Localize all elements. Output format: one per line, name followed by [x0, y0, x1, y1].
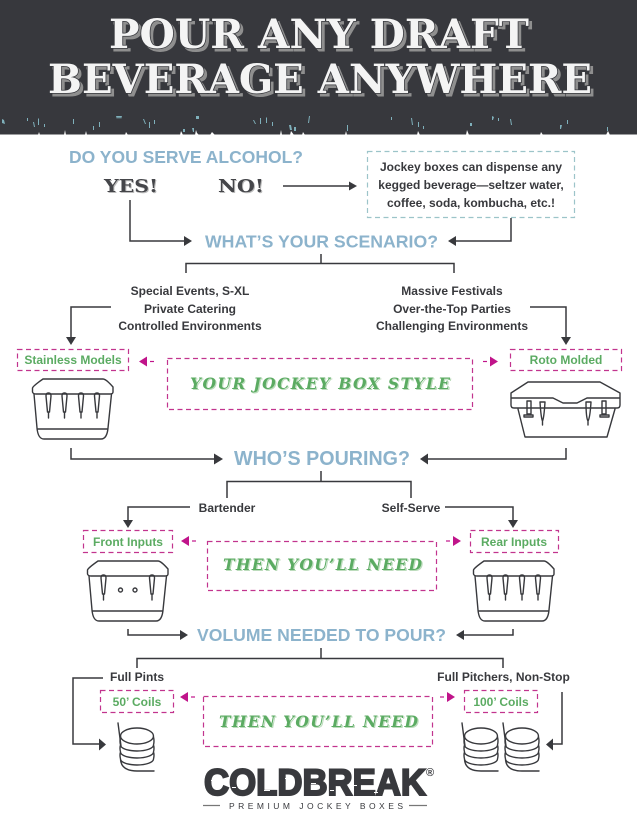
- label: 100' coils: [464, 690, 538, 712]
- text: large scenarios: Challenging Environments: [376, 319, 528, 333]
- callout: then you'll need: THEN YOU’LL NEED: [224, 556, 424, 575]
- callout: non alcoholic: Jockey boxes can dispense any: [380, 160, 562, 174]
- answer: no: NO!: [219, 177, 265, 198]
- icon: single coil: [118, 723, 154, 771]
- heading: volume needed: VOLUME NEEDED TO POUR?: [197, 625, 446, 645]
- logo tagline: PREMIUM JOCKEY BOXES: [229, 801, 403, 811]
- title: BEVERAGE ANYWHERE: [48, 56, 592, 103]
- heading: what's your scenario: WHAT’S YOUR SCENARIO?: [205, 232, 438, 252]
- callout: non alcoholic: [368, 152, 574, 218]
- text: small scenarios: [118, 284, 262, 333]
- label: 50' coils: [100, 690, 174, 712]
- label: 50' coils: 50’ Coils: [113, 695, 162, 709]
- label: stainless models: Stainless Models: [24, 353, 122, 367]
- arrow: to roto: [530, 307, 571, 345]
- label: rear inputs: [470, 530, 558, 552]
- text: large scenarios: [376, 284, 528, 333]
- connector: pouring branches: [227, 471, 411, 498]
- callout: your jockey box style: YOUR JOCKEY BOX STYLE: [191, 375, 451, 394]
- callout: non alcoholic: kegged beverage—seltzer water,: [378, 178, 564, 192]
- callout: then you'll need: THEN YOU’LL NEED: [219, 712, 419, 731]
- arrow: to front inputs: [123, 507, 190, 528]
- label: roto molded: [510, 350, 622, 370]
- connector: scenario branches: [186, 254, 454, 273]
- callout: non alcoholic: coffee, soda, kombucha, etc.!: [387, 196, 555, 210]
- arrow: front to volume: [128, 629, 188, 640]
- label: front inputs: Front Inputs: [93, 535, 163, 549]
- arrow: pints to coil: [73, 678, 106, 750]
- callout: then you'll need: [204, 696, 432, 746]
- callout: then you'll need: THEN YOU’LL NEED: [220, 713, 420, 732]
- arrow: to stainless: [66, 307, 111, 345]
- answer: yes: YES!: [104, 177, 159, 198]
- text: small scenarios: Controlled Environments: [118, 319, 262, 333]
- answer: yes: YES!: [103, 176, 158, 197]
- pink arrow left: [181, 536, 196, 546]
- arrow: pitchers to coils: [546, 692, 562, 750]
- title: POUR ANY DRAFT: [112, 14, 532, 61]
- callout: then you'll need: [208, 542, 436, 590]
- icon: front input cooler: [88, 561, 168, 621]
- logo: coldbreak: COLDBREAK: [204, 762, 426, 803]
- pink arrow right: [446, 536, 461, 546]
- title: BEVERAGE ANYWHERE: [51, 59, 595, 106]
- arrow: stainless to pouring: [71, 448, 223, 464]
- text: small scenarios: Special Events, S-XL: [131, 284, 249, 298]
- title: [48, 11, 595, 106]
- text: small scenarios: Private Catering: [144, 302, 236, 316]
- arrow: yes to scenario: [130, 200, 192, 246]
- text: full pitchers: Full Pitchers, Non-Stop: [437, 670, 570, 684]
- text: bartender: Bartender: [199, 501, 256, 515]
- icon: double coil: [462, 723, 539, 771]
- icon: stainless cooler: [32, 379, 113, 439]
- pink arrow left: [180, 692, 195, 702]
- label: 100' coils: 100’ Coils: [473, 695, 529, 709]
- answer: no: NO!: [218, 176, 264, 197]
- pink arrow right: [440, 692, 455, 702]
- arrow: no to callout: [283, 182, 357, 190]
- text: full pints: Full Pints: [110, 670, 164, 684]
- arrow: rear to volume: [456, 629, 513, 640]
- logo: coldbreak: ®: [426, 767, 434, 779]
- title: POUR ANY DRAFT: [109, 11, 529, 58]
- text: large scenarios: Over-the-Top Parties: [393, 302, 511, 316]
- callout: then you'll need: THEN YOU’LL NEED: [223, 555, 423, 574]
- connector: volume branches: [137, 648, 503, 668]
- heading: who's pouring: WHO’S POURING?: [234, 448, 410, 470]
- icon: roto molded cooler: [511, 382, 620, 437]
- callout: your jockey box style: YOUR JOCKEY BOX STYLE: [190, 374, 450, 393]
- icon: rear input cooler: [474, 561, 554, 621]
- label: stainless models: [18, 350, 128, 370]
- arrow: roto to pouring: [420, 448, 566, 464]
- arrow: to rear inputs: [445, 507, 518, 528]
- label: rear inputs: Rear Inputs: [481, 535, 547, 549]
- heading: do you serve alcohol: DO YOU SERVE ALCOHOL?: [69, 147, 303, 167]
- label: front inputs: [84, 530, 172, 552]
- callout: your jockey box style: [168, 358, 472, 410]
- header banner: [0, 0, 637, 135]
- pink arrow right: [483, 356, 498, 366]
- text: self-serve: Self-Serve: [382, 501, 441, 515]
- text: large scenarios: Massive Festivals: [401, 284, 503, 298]
- label: roto molded: Roto Molded: [530, 353, 602, 367]
- arrow: callout to scenario: [448, 218, 511, 246]
- pink arrow left: [139, 356, 154, 366]
